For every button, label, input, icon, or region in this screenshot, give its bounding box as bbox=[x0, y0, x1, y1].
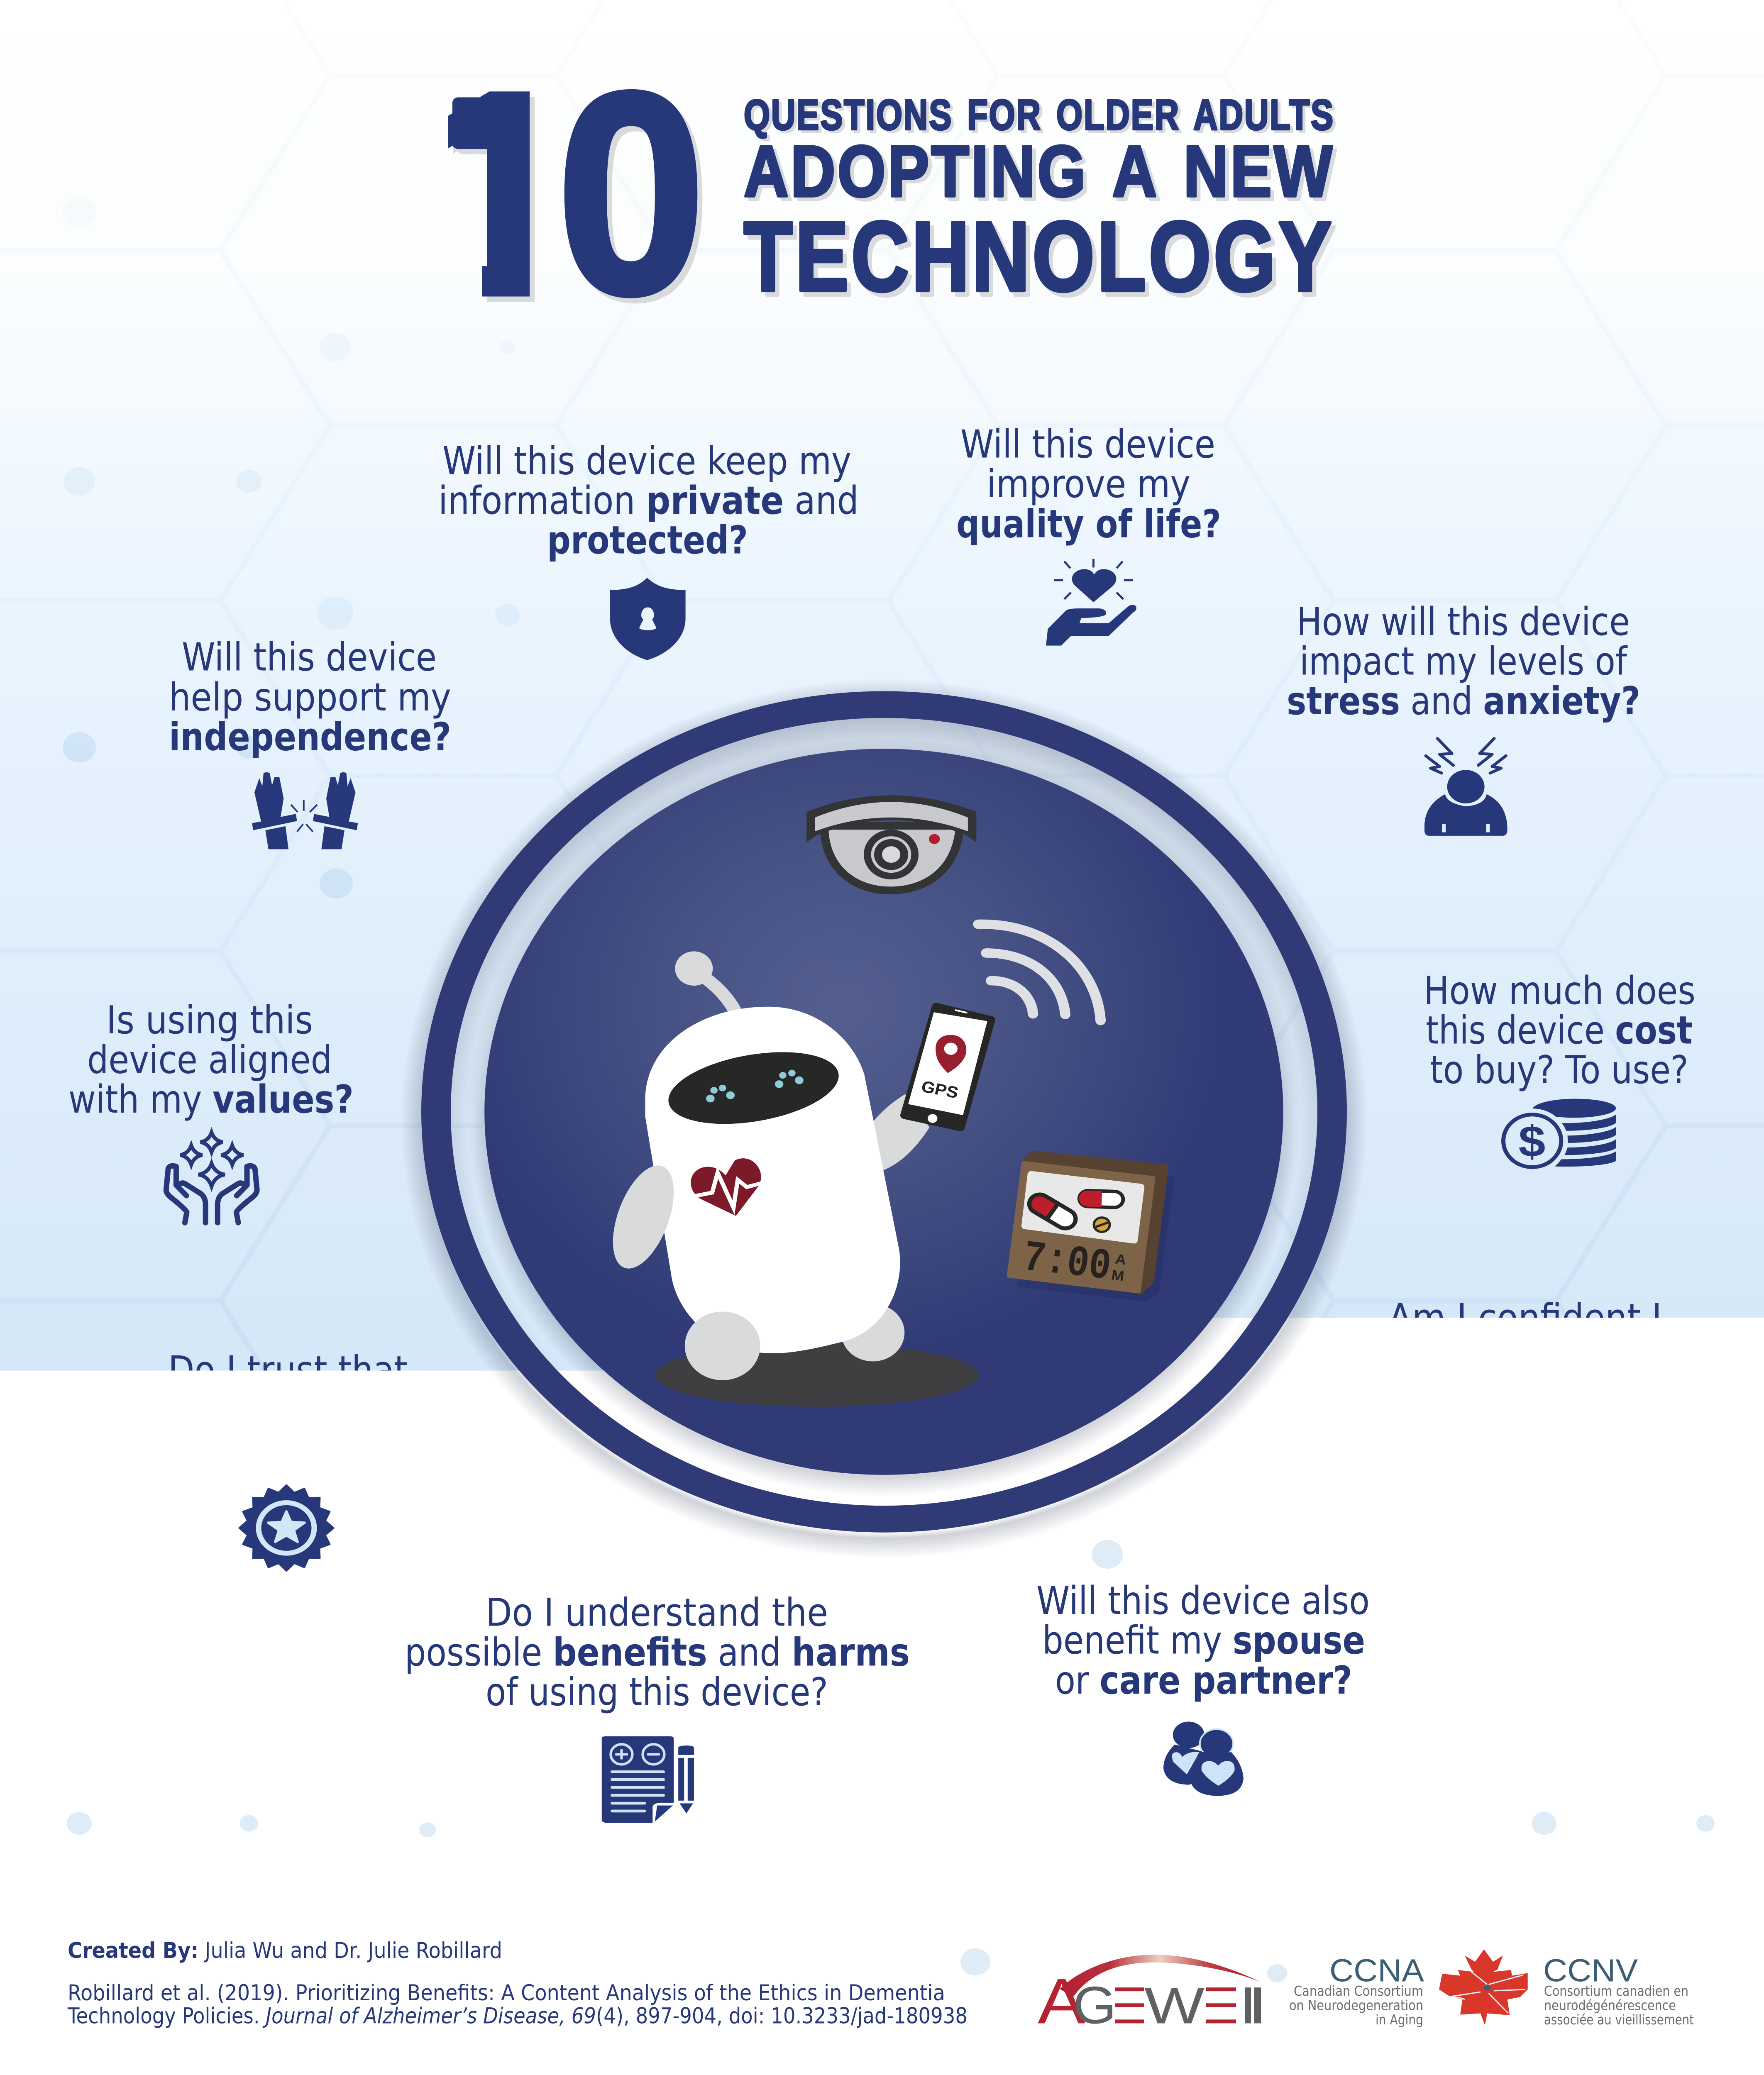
logo: CCNA bbox=[1289, 1953, 1424, 2028]
title line shadows: TECHNOLOGY bbox=[748, 206, 1339, 316]
footer credits bbox=[67, 1938, 968, 2029]
created by: Created By: Julia Wu and Dr. Julie Robillard bbox=[68, 1938, 502, 1964]
title line shadows: ADOPTING A NEW bbox=[748, 134, 1338, 215]
question: ease of use bbox=[1367, 1296, 1684, 1523]
question: good quality bbox=[157, 1348, 418, 1571]
icon: two people with hearts bbox=[1163, 1721, 1244, 1796]
citation: Technology Policies. Journal of Alzheimer’s Disease, 69(4), 897-904, doi: 10.3233/jad-180938 bbox=[67, 2004, 968, 2029]
stress text bbox=[1287, 599, 1640, 723]
icon: quality badge bbox=[239, 1485, 333, 1571]
cost text: to buy? To use? bbox=[1430, 1047, 1688, 1092]
quality of life text bbox=[956, 422, 1221, 546]
values text: with my values? bbox=[68, 1077, 354, 1122]
floor shadow bbox=[655, 1344, 979, 1407]
logo: AGE-WELL: G bbox=[1073, 1976, 1117, 2035]
benefits and harms text: of using this device? bbox=[486, 1670, 828, 1714]
title bbox=[410, 27, 1339, 365]
ease of use text: this device easily? bbox=[1367, 1375, 1684, 1419]
icon: coins: $ bbox=[1519, 1116, 1545, 1166]
pill reminder clock: A bbox=[1114, 1251, 1127, 1268]
question: stress and anxiety bbox=[1287, 599, 1640, 836]
care partner text: benefit my spouse bbox=[1042, 1618, 1365, 1662]
title line shadows: QUESTIONS FOR OLDER ADULTS bbox=[747, 93, 1337, 141]
logo: CCNV: associée au vieillissement bbox=[1544, 2012, 1694, 2028]
logo: CCNA: on Neurodegeneration bbox=[1289, 1998, 1423, 2014]
title line: questions for older adults: QUESTIONS FOR OLDER ADULTS bbox=[744, 91, 1334, 139]
number 10 shadow bbox=[415, 32, 711, 365]
icon: hands breaking handcuffs bbox=[252, 772, 358, 849]
logo: CCNA: in Aging bbox=[1376, 2012, 1423, 2028]
number 10 shadow: 1 bbox=[415, 32, 598, 365]
values text: device aligned bbox=[87, 1038, 332, 1082]
icon: hands with stars bbox=[166, 1133, 257, 1223]
central circle illustration bbox=[401, 679, 1368, 1558]
logo: CCNV: CCNV bbox=[1543, 1953, 1638, 1989]
question: care partner bbox=[1036, 1578, 1370, 1796]
wifi signal arcs bbox=[978, 924, 1101, 1020]
cost text: How much does bbox=[1424, 968, 1696, 1013]
number 10 shadow: 0 bbox=[562, 38, 711, 359]
good quality text: good quality? bbox=[161, 1428, 413, 1472]
number 10 bbox=[410, 27, 706, 360]
icon: stressed person bbox=[1424, 738, 1507, 836]
privacy text bbox=[438, 439, 859, 563]
question: privacy bbox=[438, 439, 859, 660]
question: benefits and harms bbox=[405, 1590, 910, 1823]
phone with GPS bbox=[904, 1007, 991, 1127]
quality of life text: improve my bbox=[987, 462, 1190, 506]
logo: CCNV: neurodégénérescence bbox=[1544, 1998, 1676, 2014]
question: cost bbox=[1424, 968, 1696, 1167]
citation: Robillard et al. (2019). Prioritizing Benefits: A Content Analysis of the Ethics in Dementia bbox=[68, 1980, 945, 2006]
logo: CCNV bbox=[1543, 1953, 1694, 2028]
cost text bbox=[1424, 968, 1696, 1092]
inner disc bbox=[484, 749, 1283, 1475]
logo: AGE-WELL: A bbox=[1038, 1966, 1086, 2037]
good quality text bbox=[157, 1348, 418, 1472]
pill reminder clock bbox=[1009, 1152, 1174, 1301]
privacy text: Will this device keep my bbox=[442, 439, 851, 483]
ease of use text: Am I confident I bbox=[1388, 1296, 1662, 1340]
ease of use text: will be able to use bbox=[1370, 1335, 1681, 1380]
outer ring bbox=[436, 705, 1332, 1519]
privacy text: information private and bbox=[438, 478, 859, 523]
pill reminder clock: 7:00 bbox=[1020, 1233, 1114, 1291]
independence text bbox=[169, 635, 451, 759]
question: quality of life bbox=[956, 422, 1221, 646]
ease of use text bbox=[1367, 1296, 1684, 1419]
robot bbox=[601, 951, 929, 1380]
quality of life text: Will this device bbox=[960, 422, 1215, 467]
logo: CCNA: Canadian Consortium bbox=[1294, 1984, 1423, 1999]
benefits and harms text: possible benefits and harms bbox=[405, 1630, 910, 1675]
question: values bbox=[68, 998, 354, 1223]
number 10: 0 bbox=[557, 33, 706, 353]
icon: document and pencil bbox=[602, 1736, 694, 1823]
logo: AGE-WELL bbox=[1038, 1955, 1261, 2037]
care partner text: or care partner? bbox=[1055, 1658, 1352, 1703]
quality of life text: quality of life? bbox=[956, 502, 1221, 546]
title line: adopting a new: ADOPTING A NEW bbox=[744, 131, 1334, 212]
independence text: Will this device bbox=[182, 635, 437, 679]
title line shadows bbox=[747, 93, 1339, 316]
good quality text: this device is of bbox=[157, 1388, 418, 1433]
values text bbox=[68, 998, 354, 1122]
independence text: help support my bbox=[169, 675, 451, 720]
pill reminder clock: M bbox=[1111, 1267, 1125, 1284]
number 10: 1 bbox=[410, 27, 593, 360]
logo: maple leaf bbox=[1439, 1949, 1528, 2025]
icon: coins bbox=[1503, 1099, 1616, 1167]
stress text: stress and anxiety? bbox=[1287, 679, 1640, 723]
security camera bbox=[806, 795, 976, 894]
icon: heart in hand bbox=[1046, 559, 1136, 646]
logo: CCNV: Consortium canadien en bbox=[1544, 1984, 1688, 1999]
benefits and harms text bbox=[405, 1590, 910, 1714]
benefits and harms text: Do I understand the bbox=[486, 1590, 828, 1635]
values text: Is using this bbox=[106, 998, 313, 1042]
citation bbox=[67, 1980, 968, 2029]
cost text: this device cost bbox=[1426, 1008, 1693, 1052]
stress text: impact my levels of bbox=[1300, 639, 1628, 684]
icon: pointing hand bbox=[1495, 1428, 1556, 1523]
title line: technology: TECHNOLOGY bbox=[744, 201, 1334, 312]
icon: shield with keyhole bbox=[610, 578, 686, 660]
phone with GPS: GPS bbox=[919, 1077, 960, 1102]
logo: CCNA: CCNA bbox=[1329, 1953, 1424, 1989]
care partner text: Will this device also bbox=[1036, 1578, 1370, 1623]
question: independence bbox=[169, 635, 451, 849]
independence text: independence? bbox=[169, 715, 451, 759]
good quality text: Do I trust that bbox=[168, 1348, 408, 1393]
logo: AGE-WELL: W bbox=[1144, 1977, 1205, 2034]
care partner text bbox=[1036, 1578, 1370, 1703]
stress text: How will this device bbox=[1297, 599, 1630, 644]
privacy text: protected? bbox=[547, 518, 748, 563]
